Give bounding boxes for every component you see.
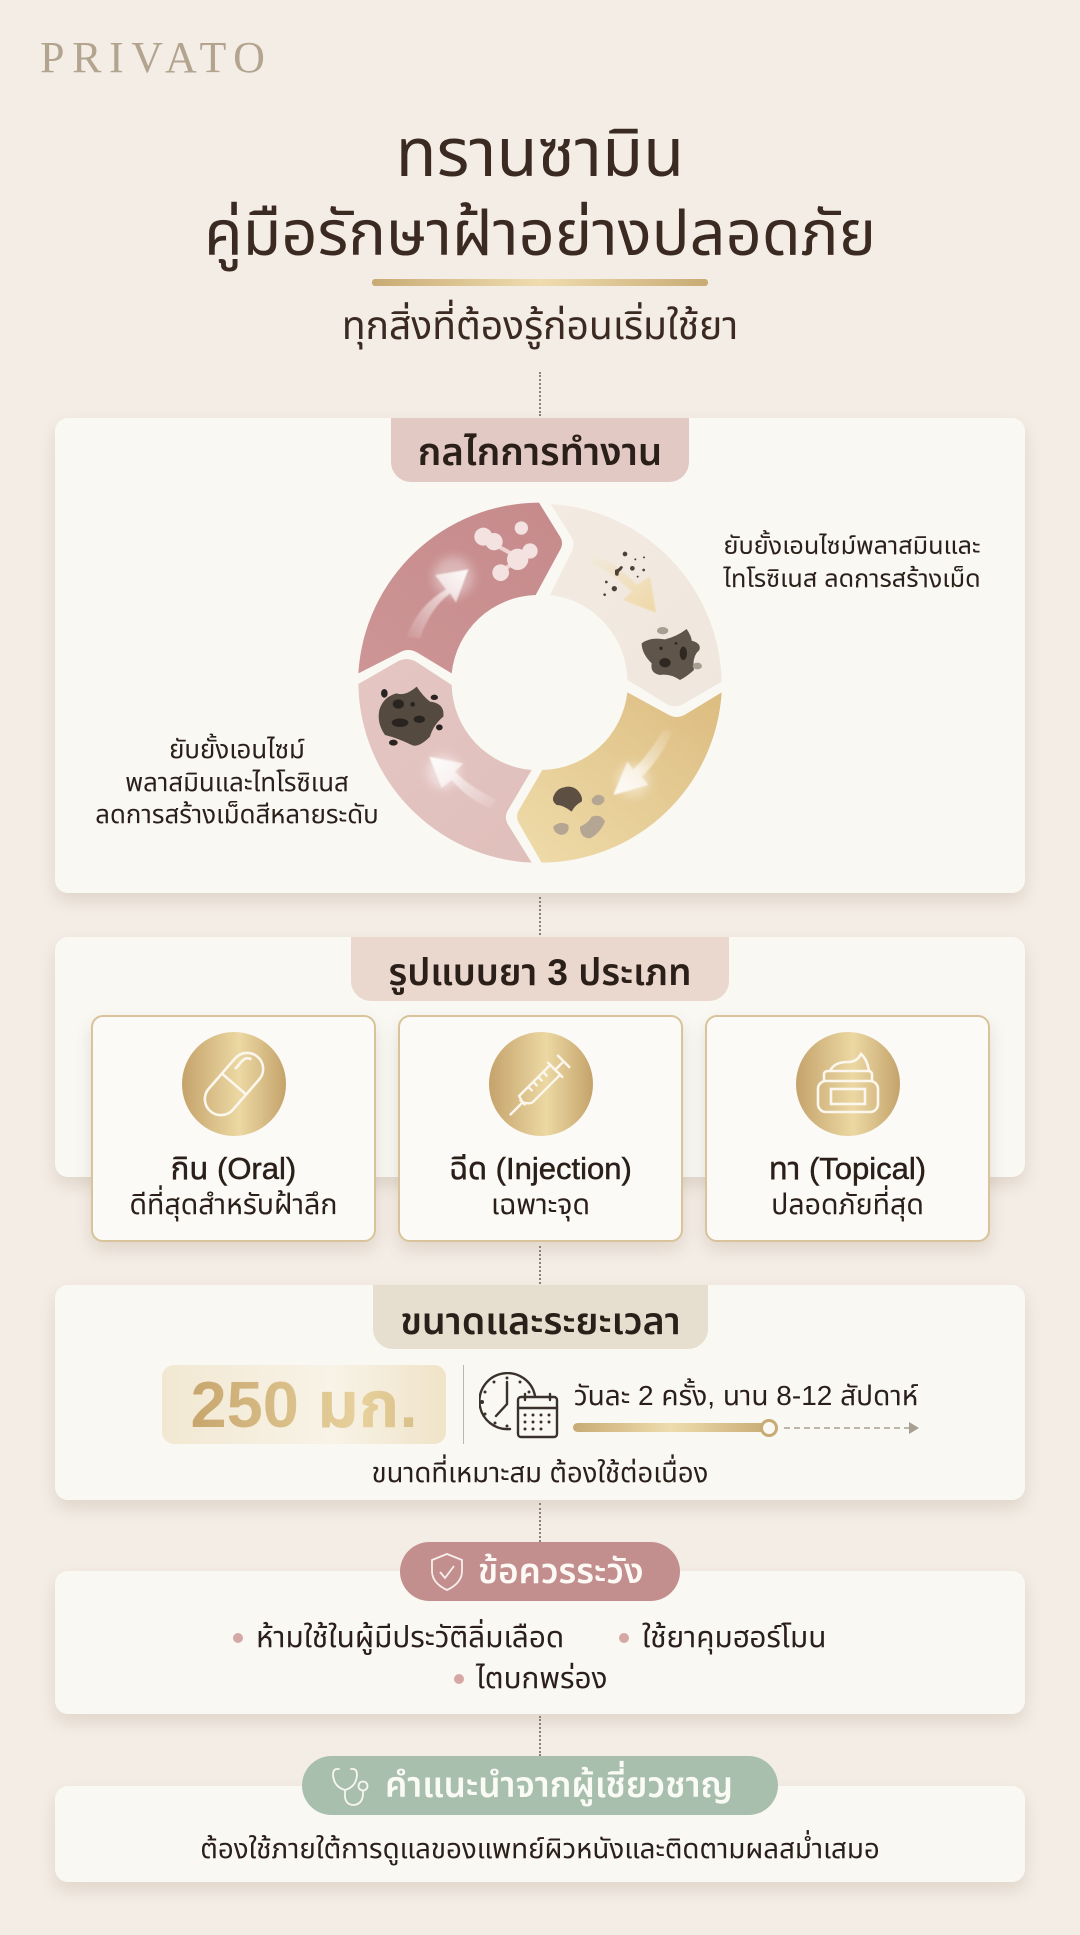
heading: dosage: ขนาดและระยะเวลา [400,1300,681,1342]
heading: forms: รูปแบบยา 3 ประเภท [388,952,692,993]
icon: syringe [489,1032,593,1136]
heading: expert advice: คำแนะนำจากผู้เชี่ยวชาญ [385,1766,733,1805]
segment: melanin [358,659,532,863]
text: right caption: ยับยั้งเอนไซม์พลาสมินและ [724,532,980,560]
card: oral [91,1015,376,1242]
heading: forms [351,937,729,1001]
icon: capsule [182,1032,286,1136]
icon: shield [431,1553,463,1591]
text: right caption: ไทโรซิเนส ลดการสร้างเม็ด [723,565,981,593]
card: oral: ดีที่สุดสำหรับฝ้าลึก [129,1189,338,1221]
panel: three forms [51,937,1029,1254]
text: left caption: ลดการสร้างเม็ดสีหลายระดับ [95,801,379,829]
text: right caption [723,530,981,593]
text: left caption: ยับยั้งเอนไซม์ [169,736,305,764]
caution list: ห้ามใช้ในผู้มีประวัติลิ่มเลือด [256,1621,564,1654]
segment: gold fading [517,692,722,863]
subtitle: ทุกสิ่งที่ต้องรู้ก่อนเริ่มใช้ยา [342,305,738,348]
caution list: ไตบกพร่อง [476,1662,607,1695]
timeline [573,1419,919,1437]
panel: expert advice [51,1756,1029,1894]
card: oral: กิน (Oral) [171,1151,296,1186]
title: คู่มือรักษาฝ้าอย่างปลอดภัย [204,199,876,269]
card: topical [705,1015,990,1242]
card: injection [398,1015,683,1242]
icon: cream jar [796,1032,900,1136]
text: dose note: ขนาดที่เหมาะสม ต้องใช้ต่อเนื่อง [372,1457,708,1488]
panel: cautions [51,1542,1029,1726]
caution list: ใช้ยาคุมฮอร์โมน [642,1621,826,1654]
text: advice: ต้องใช้ภายใต้การดูแลของแพทย์ผิวหนังและติดตามผลสม่ำเสมอ [200,1833,880,1864]
heading: mechanism [391,418,689,482]
title: ทรานซามิน [396,116,684,191]
caution list [233,1619,826,1695]
heading: dosage [373,1285,708,1349]
icon: stethoscope [332,1768,368,1806]
heading: expert advice [302,1756,778,1815]
heading: mechanism: กลไกการทำงาน [418,431,662,474]
card: topical: ทา (Topical) [769,1151,926,1186]
text: left caption [95,734,379,829]
ring diagram [358,502,722,863]
card: injection: เฉพาะจุด [491,1189,590,1221]
heading: cautions [400,1542,680,1601]
segment: inhibition [550,504,722,706]
logo: PRIVATO [40,33,273,82]
text: frequency: วันละ 2 ครั้ง, นาน 8-12 สัปดาห์ [574,1380,918,1411]
text: left caption: พลาสมินและไทโรซิเนส [125,768,349,796]
card: topical: ปลอดภัยที่สุด [771,1189,924,1221]
dose value: 250 มก. [190,1368,418,1441]
card: injection: ฉีด (Injection) [449,1151,632,1186]
panel: dosage [51,1285,1029,1512]
segment: plasmin [358,503,562,673]
icon: clock and calendar [479,1372,558,1438]
heading: cautions: ข้อควรระวัง [478,1552,644,1591]
title underline [372,279,708,286]
title [204,116,876,272]
panel: mechanism [51,418,1029,905]
